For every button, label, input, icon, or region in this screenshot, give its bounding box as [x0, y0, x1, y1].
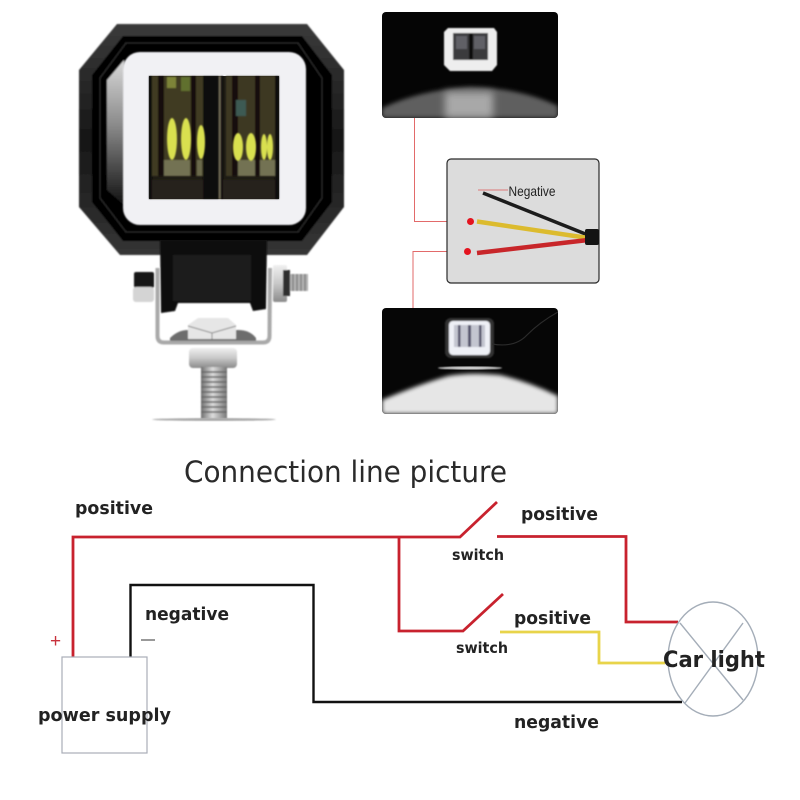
black negative wire: [130, 585, 682, 702]
label: negative bottom: negative: [514, 713, 599, 733]
lit lamp: [445, 318, 494, 358]
halo lamp: [444, 28, 497, 71]
mounting bracket: [133, 240, 308, 342]
bright beam on ground: [382, 374, 558, 414]
red dot: yellow wire: [467, 218, 474, 225]
ground shadow: [152, 418, 276, 421]
red connector lines: [413, 118, 470, 308]
power supply box: [62, 657, 147, 753]
black wire: [483, 193, 588, 235]
panel: low beam halo photo: [382, 12, 558, 118]
cable sheath: [585, 229, 599, 245]
yellow wire: [477, 222, 588, 238]
label: positive middle: positive: [514, 609, 591, 629]
red wire: [477, 240, 588, 253]
title: Connection line picture: [184, 455, 507, 489]
yellow wire to car light: [500, 632, 665, 663]
red dot: red wire: [464, 248, 471, 255]
minus sign: [141, 639, 155, 641]
red branch to switch two: [399, 537, 503, 631]
label: negative left: negative: [145, 605, 229, 625]
wiring diagram: [38, 499, 765, 753]
label: positive top left: positive: [75, 499, 153, 519]
red positive wire: supply to switch one: [73, 502, 497, 657]
beam on ground: [382, 87, 558, 118]
negative leader: [478, 189, 508, 191]
label: car light: Car light: [663, 648, 765, 673]
lamp cable: [492, 312, 558, 345]
red wire to car light: [497, 536, 678, 622]
white halo ring: [123, 52, 306, 225]
label: power supply: power supply: [38, 706, 172, 726]
panel: wire photo: [447, 159, 599, 283]
mounting bolt: [170, 318, 256, 419]
label: switch one: switch: [452, 546, 504, 564]
plus sign: +: [50, 631, 61, 652]
lamp product photo: [79, 24, 344, 421]
LED window: [149, 76, 279, 199]
label: positive top right: positive: [521, 505, 598, 525]
panel: high beam photo: [382, 308, 558, 414]
lamp housing: [79, 24, 344, 255]
negative label: Negative: [508, 183, 556, 199]
car light symbol: [668, 602, 758, 716]
label: switch two: switch: [456, 639, 508, 657]
